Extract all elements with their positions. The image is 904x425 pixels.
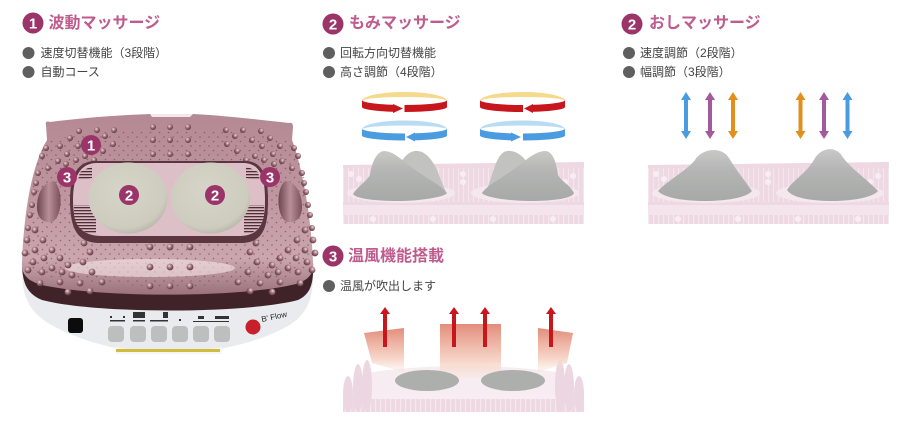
product photo: foot massager bbox=[22, 114, 318, 354]
warm air left bbox=[364, 328, 404, 372]
warm air right bbox=[538, 328, 573, 372]
feature list: kneading massage: 回転方向切替機能 bbox=[340, 45, 436, 60]
heading: warm air: 3 bbox=[329, 248, 337, 266]
rotation arrows left bbox=[362, 92, 447, 143]
panel: kneading massage bbox=[322, 14, 584, 224]
base with kneading balls bbox=[343, 151, 584, 224]
number badges: 2 bbox=[125, 188, 133, 204]
number badges: 3 bbox=[266, 170, 274, 186]
left stone bbox=[395, 370, 459, 391]
bumps bbox=[22, 124, 318, 295]
heading: warm air bbox=[322, 246, 444, 266]
warm air centre bbox=[440, 324, 501, 378]
feature list: wave massage: 速度切替機能（3段階） bbox=[40, 45, 167, 60]
heading: warm air: 温風機能搭載 bbox=[348, 246, 444, 265]
base with pressing balls bbox=[648, 149, 889, 224]
rotation arrows right bbox=[480, 92, 565, 143]
feature list: warm air: 温風が吹出します bbox=[340, 278, 436, 293]
heading: kneading massage bbox=[322, 14, 461, 34]
red up arrows bbox=[380, 307, 556, 347]
heading: pressing massage: おしマッサージ bbox=[649, 14, 761, 32]
heading: kneading massage: もみマッサージ bbox=[349, 14, 461, 32]
feature list: wave massage bbox=[22, 45, 167, 79]
heading: pressing massage: 2 bbox=[628, 16, 636, 34]
massage ball left bbox=[88, 162, 168, 234]
vertical arrows bbox=[681, 92, 852, 139]
side knob left bbox=[37, 181, 61, 222]
right stone bbox=[481, 370, 545, 391]
panel: pressing massage bbox=[622, 14, 889, 224]
feature list: pressing massage: 幅調節（3段階） bbox=[640, 64, 731, 79]
dark underside bbox=[22, 262, 313, 310]
heading: wave massage bbox=[22, 12, 160, 34]
control panel bbox=[68, 310, 288, 352]
feature list: pressing massage: 速度調節（2段階） bbox=[640, 45, 743, 60]
heading: pressing massage bbox=[622, 14, 761, 34]
base with warm air bbox=[343, 324, 584, 412]
feature list: kneading massage bbox=[323, 45, 443, 79]
number badges: 2 bbox=[211, 188, 219, 204]
heading: kneading massage: 2 bbox=[329, 16, 337, 34]
side knob right bbox=[278, 181, 302, 222]
heading: wave massage: 1 bbox=[29, 16, 37, 32]
feature list: kneading massage: 高さ調節（4段階） bbox=[340, 64, 443, 79]
white base bbox=[22, 272, 313, 354]
panel: warm air bbox=[322, 246, 584, 412]
number badges: 3 bbox=[63, 170, 71, 186]
number badges: 1 bbox=[87, 138, 95, 154]
massage ball right bbox=[171, 162, 250, 234]
central recess bbox=[70, 161, 268, 243]
feature list: wave massage: 自動コース bbox=[40, 65, 100, 79]
panel: wave massage bbox=[22, 12, 167, 79]
feature list: pressing massage bbox=[623, 45, 743, 79]
control panel: B' Flow bbox=[261, 310, 288, 324]
body top bbox=[22, 114, 313, 295]
heading: wave massage: 波動マッサージ bbox=[48, 14, 160, 32]
number badges bbox=[57, 135, 280, 205]
